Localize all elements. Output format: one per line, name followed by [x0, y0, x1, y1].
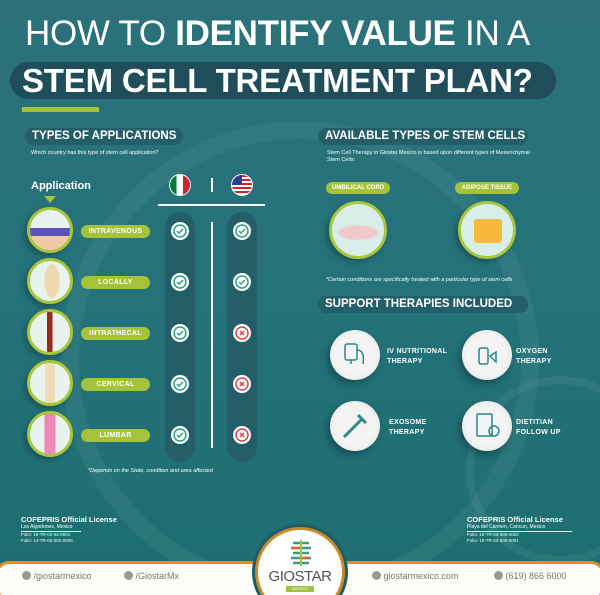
exosome	[324, 401, 426, 458]
flag usa	[231, 174, 253, 196]
license right: Playa del Carmen, Cancun, Mexico	[467, 524, 545, 530]
license right: Folio: 19-TR-23-008-0002	[467, 532, 519, 537]
iv nutritional	[324, 330, 447, 386]
exosome: EXOSOME	[389, 419, 426, 426]
row lumbar	[22, 411, 251, 462]
heading: AVAILABLE TYPES OF STEM CELLS	[325, 130, 525, 142]
logo	[255, 527, 345, 595]
footer bar	[0, 561, 600, 595]
license left: Los Algodones, Mexico	[21, 524, 72, 530]
umbilical cord: UMBILICAL CORD	[332, 185, 384, 191]
row intravenous: INTRAVENOUS	[89, 228, 142, 235]
oxygen: OXYGEN	[516, 348, 548, 355]
heading	[318, 128, 528, 145]
panel: stem cells	[318, 128, 530, 283]
license right: COFEPRIS Official License	[467, 515, 563, 524]
logo: GIOSTAR	[269, 568, 331, 585]
row locally: LOCALLY	[98, 279, 133, 286]
exosome: THERAPY	[389, 429, 425, 436]
iv nutritional: IV NUTRITIONAL	[387, 348, 447, 355]
footnote: *Certain conditions are specifically treated with a particular type of stem cells	[326, 277, 512, 283]
instagram: /giostarmexico	[34, 571, 92, 581]
row cervical	[22, 360, 251, 410]
dietitian: DIETITIAN	[516, 419, 553, 426]
heading: SUPPORT THERAPIES INCLUDED	[325, 298, 512, 310]
heading	[25, 128, 183, 145]
facebook: /GiostarMx	[136, 571, 179, 581]
panel: types of applications	[22, 128, 265, 474]
row intrathecal	[22, 309, 251, 360]
license left: Folio: 14-TR-02-002-0008	[21, 538, 73, 543]
subtitle: Which country has this type of stem cell application?	[31, 150, 158, 156]
website: giostarmexico.com	[384, 571, 459, 581]
footnote: *Depends on the State, condition and area affected	[88, 468, 213, 474]
adipose tissue: ADIPOSE TISSUE	[462, 185, 512, 191]
arrow	[44, 196, 56, 203]
dietitian	[456, 401, 561, 458]
row intravenous	[22, 207, 251, 258]
title line 2 pill: STEM CELL TREATMENT PLAN?	[22, 62, 533, 99]
license left: Folio: 18-TR-02-02-0001	[21, 532, 70, 537]
iv nutritional: THERAPY	[387, 358, 423, 365]
accent bar	[22, 107, 99, 112]
license left	[21, 515, 117, 543]
application label: Application	[31, 180, 91, 192]
description: Stem Cell Therapy in Giostar Mexico is based upon different types of Mesenchymal Stem Cells:	[327, 150, 530, 163]
phone: (619) 866 6000	[506, 571, 567, 581]
flag mexico	[169, 174, 191, 196]
column backgrounds	[165, 212, 195, 462]
logo: MEXICO	[292, 586, 308, 591]
adipose tissue	[454, 182, 519, 264]
license right: Folio: 19-TR-23-008-0001	[467, 538, 519, 543]
row locally	[22, 258, 251, 308]
oxygen: THERAPY	[516, 358, 552, 365]
row cervical: CERVICAL	[96, 381, 135, 388]
panel: support therapies	[318, 296, 561, 458]
row intrathecal: INTRATHECAL	[89, 330, 142, 337]
heading: TYPES OF APPLICATIONS	[32, 130, 176, 142]
dietitian: FOLLOW UP	[516, 429, 561, 436]
license left: COFEPRIS Official License	[21, 515, 117, 524]
heading	[318, 296, 528, 313]
umbilical cord	[324, 182, 390, 264]
title line 1: HOW TO IDENTIFY VALUE IN A	[25, 14, 530, 53]
row lumbar: LUMBAR	[99, 432, 132, 439]
oxygen	[456, 330, 552, 386]
license right	[467, 515, 572, 543]
